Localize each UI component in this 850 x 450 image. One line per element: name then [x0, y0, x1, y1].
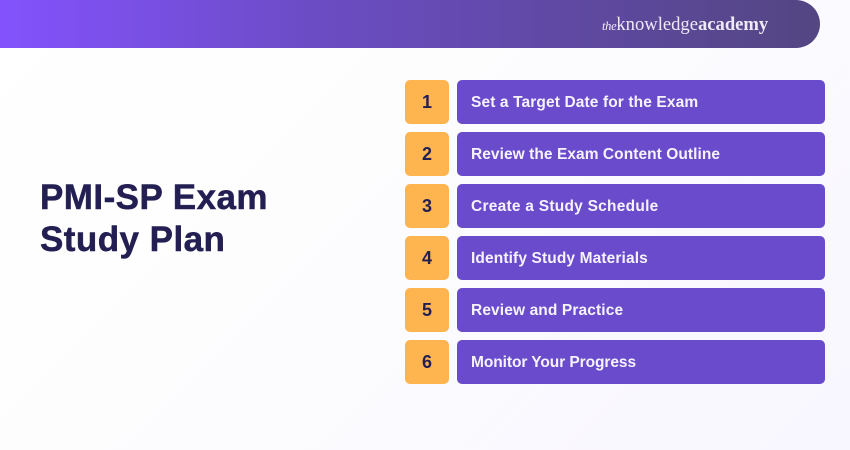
step 3 number	[405, 184, 449, 228]
step 1 label: Set a Target Date for the Exam	[471, 94, 698, 111]
step 4 number: 4	[422, 248, 432, 268]
step 4 number	[405, 236, 449, 280]
step 2 number	[405, 132, 449, 176]
step 5 label: Review and Practice	[471, 302, 623, 319]
step 1 number	[405, 80, 449, 124]
step 6 label	[457, 340, 825, 384]
step 6 number	[405, 340, 449, 384]
header banner	[0, 0, 820, 48]
step 2 number: 2	[422, 144, 432, 164]
step 3 label: Create a Study Schedule	[471, 198, 659, 215]
logo: the knowledge academy: theknowledgeacademy	[602, 14, 768, 35]
step 1 label	[457, 80, 825, 124]
step 2 label	[457, 132, 825, 176]
title: PMI-SP Exam	[40, 178, 268, 217]
step 3 number: 3	[422, 196, 432, 216]
step 6 number: 6	[422, 352, 432, 372]
step 3 label	[457, 184, 825, 228]
step 4 label	[457, 236, 825, 280]
step 5 number: 5	[422, 300, 432, 320]
title: Study Plan	[40, 220, 225, 259]
step 5 label	[457, 288, 825, 332]
step 4 label: Identify Study Materials	[471, 250, 648, 267]
step 1 number: 1	[422, 92, 432, 112]
title	[40, 178, 268, 259]
step 2 label: Review the Exam Content Outline	[471, 146, 720, 163]
step 5 number	[405, 288, 449, 332]
step 6 label: Monitor Your Progress	[471, 354, 636, 371]
